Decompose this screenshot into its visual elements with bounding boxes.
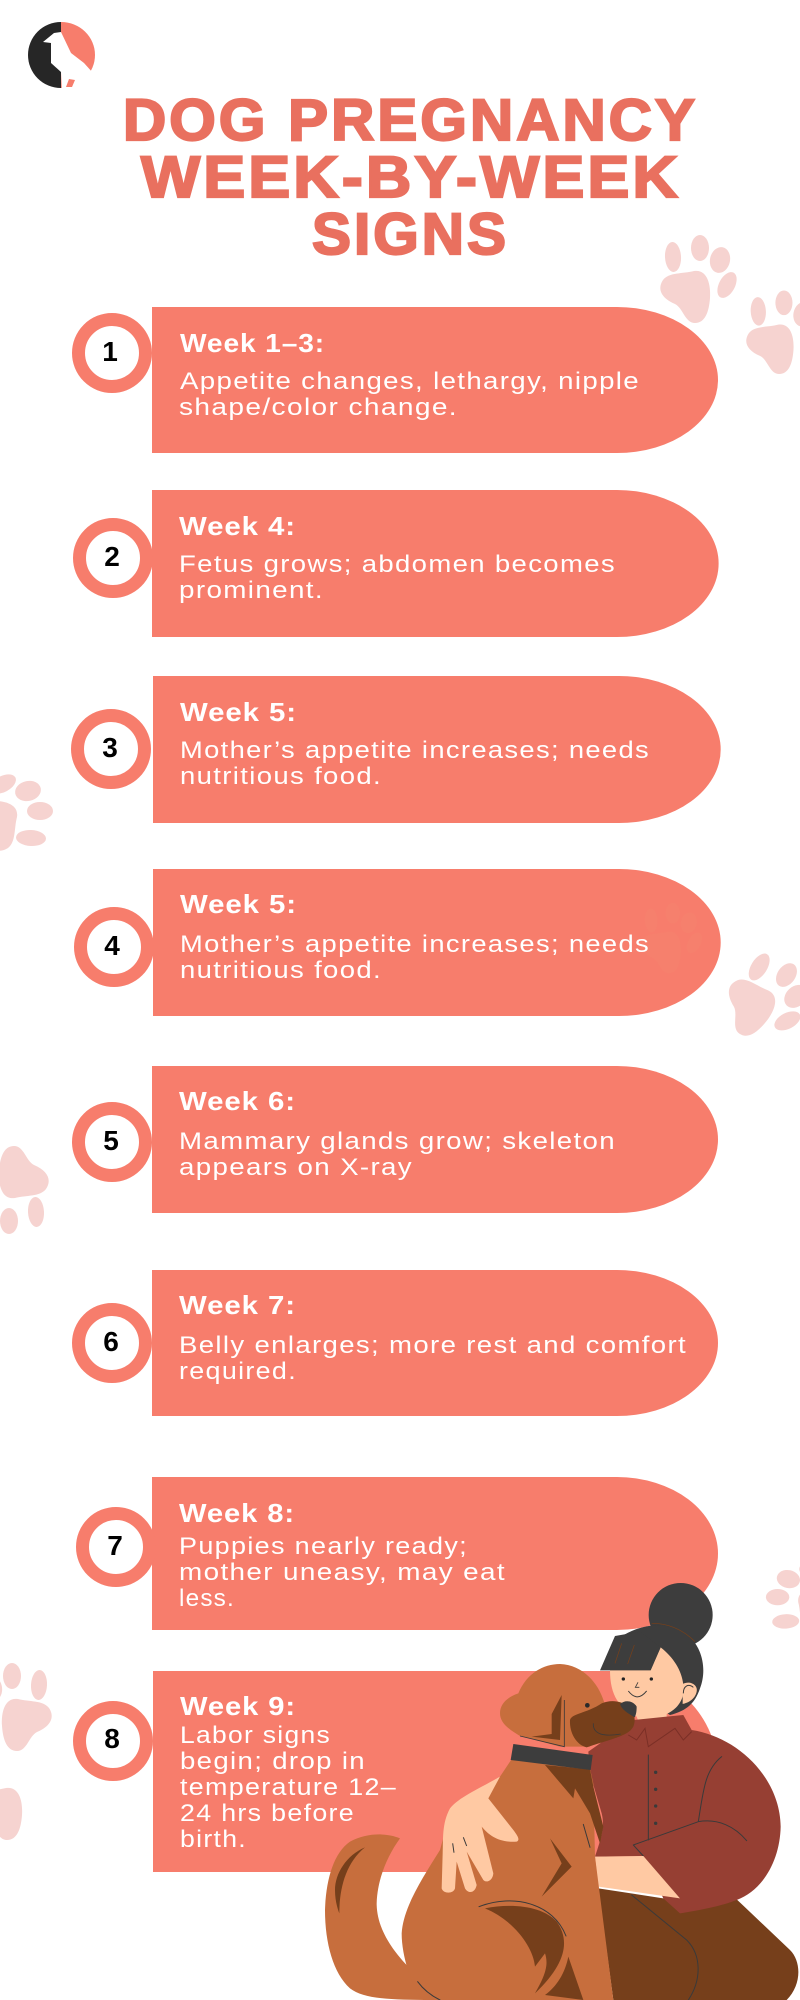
paw: left bottom partial pad xyxy=(0,1788,22,1840)
number badge 7: 7 xyxy=(107,1530,123,1561)
number badge 6: 6 xyxy=(103,1326,119,1357)
faint paw on panel xyxy=(641,903,705,973)
paw: left edge lower xyxy=(0,1146,49,1234)
haunch shadow xyxy=(485,1906,564,1993)
ear shadow xyxy=(532,1695,562,1740)
number badge 4 xyxy=(80,914,148,980)
number badge 3: 3 xyxy=(102,732,118,763)
number badge 2: 2 xyxy=(104,541,120,572)
panel: week 5: nutritious food. xyxy=(180,763,382,790)
face details xyxy=(622,1677,625,1681)
panel: week 7 xyxy=(78,1270,718,1416)
panel: week 9: begin; drop in xyxy=(180,1748,366,1775)
hair bun xyxy=(649,1583,713,1647)
number badge 4: 4 xyxy=(104,930,120,961)
number badge 8 xyxy=(80,1708,146,1774)
collar xyxy=(511,1744,593,1770)
panel: week 5: Week 5: xyxy=(180,697,297,727)
head xyxy=(500,1664,604,1747)
fringe strokes xyxy=(615,1643,634,1664)
panel: week 5 repeat: Mother’s appetite increases; needs xyxy=(180,931,650,958)
chest shadow xyxy=(545,1765,603,1843)
paw: right edge middle xyxy=(711,942,800,1060)
hair band xyxy=(652,1623,695,1642)
number badge 8: 8 xyxy=(104,1723,120,1754)
forearm xyxy=(595,1856,680,1898)
number badge 6 xyxy=(78,1310,146,1376)
panel: week 1-3: shape/color change. xyxy=(179,394,458,421)
illustration: woman hugging dog xyxy=(325,1583,798,2000)
panel: week 8: mother uneasy, may eat xyxy=(179,1559,506,1586)
panel: week 1-3: Week 1–3: xyxy=(180,328,325,358)
panel: week 1-3 xyxy=(78,307,718,453)
number badge 5 xyxy=(78,1108,146,1176)
title: SIGNS xyxy=(312,202,509,267)
number badge 3 xyxy=(78,716,144,782)
panel: week 5 xyxy=(78,676,721,823)
panel: week 5 repeat: Week 5: xyxy=(180,889,297,919)
panel: week 8: Week 8: xyxy=(179,1498,295,1528)
muzzle xyxy=(570,1701,635,1747)
title: WEEK-BY-WEEK xyxy=(141,145,681,210)
panel: week 9 xyxy=(80,1671,718,1872)
number badge 5: 5 xyxy=(103,1125,119,1156)
panel: week 1-3: Appetite changes, lethargy, nipple xyxy=(180,368,640,395)
paw: top right xyxy=(660,235,741,323)
hair back xyxy=(620,1625,703,1715)
woman's hand on dog xyxy=(442,1777,518,1893)
logo xyxy=(28,22,99,92)
panel: week 4 xyxy=(80,490,719,637)
panel: week 9: Labor signs xyxy=(180,1722,331,1749)
panel: week 4: prominent. xyxy=(179,577,324,604)
dog xyxy=(325,1664,637,2000)
tail xyxy=(325,1834,433,2000)
panel: week 7: Week 7: xyxy=(179,1290,296,1320)
ear xyxy=(683,1683,697,1704)
panel: week 8: Puppies nearly ready; xyxy=(179,1533,468,1560)
number badge 1: 1 xyxy=(102,336,118,367)
woman xyxy=(588,1583,798,2000)
panel: week 6: Mammary glands grow; skeleton xyxy=(179,1128,616,1155)
shirt xyxy=(588,1715,781,1913)
fringe xyxy=(600,1632,661,1670)
chest mark xyxy=(542,1838,572,1897)
paw: right edge lower xyxy=(766,1561,800,1633)
panel: week 6: appears on X-ray xyxy=(179,1154,413,1181)
panel: week 7: required. xyxy=(179,1358,297,1385)
title xyxy=(123,88,698,267)
eye xyxy=(585,1703,590,1708)
panel: week 9: 24 hrs before xyxy=(180,1800,355,1827)
panel: week 5 repeat: nutritious food. xyxy=(180,957,382,984)
panel: week 4: Week 4: xyxy=(179,511,296,541)
title: DOG PREGNANCY xyxy=(123,88,698,153)
panel: week 4: Fetus grows; abdomen becomes xyxy=(179,551,616,578)
panel: week 5: Mother’s appetite increases; needs xyxy=(180,737,650,764)
panel: week 9: temperature 12– xyxy=(180,1774,397,1801)
panel: week 9: birth. xyxy=(180,1826,247,1853)
neck and face xyxy=(610,1647,684,1748)
panel: week 6: Week 6: xyxy=(179,1086,296,1116)
shirt seams and buttons xyxy=(633,1755,747,1856)
paw: left bottom xyxy=(0,1663,52,1751)
paw: right edge upper xyxy=(746,290,800,374)
panel: week 9: Week 9: xyxy=(180,1691,296,1721)
number badge 1 xyxy=(78,320,146,386)
body xyxy=(402,1757,613,2000)
paw shadow xyxy=(545,1957,583,2000)
nose xyxy=(620,1701,637,1717)
panel: week 5 repeat xyxy=(80,869,721,1016)
panel: week 7: Belly enlarges; more rest and comfort xyxy=(179,1332,687,1359)
number badge 2 xyxy=(80,524,146,592)
panel: week 6 xyxy=(78,1066,718,1213)
number badge 7 xyxy=(82,1514,150,1580)
paw: left edge middle xyxy=(0,770,53,851)
legs xyxy=(598,1888,798,2000)
panel: week 8 xyxy=(82,1477,718,1630)
panel: week 8: less. xyxy=(179,1585,235,1612)
collar lines xyxy=(628,1728,692,1747)
